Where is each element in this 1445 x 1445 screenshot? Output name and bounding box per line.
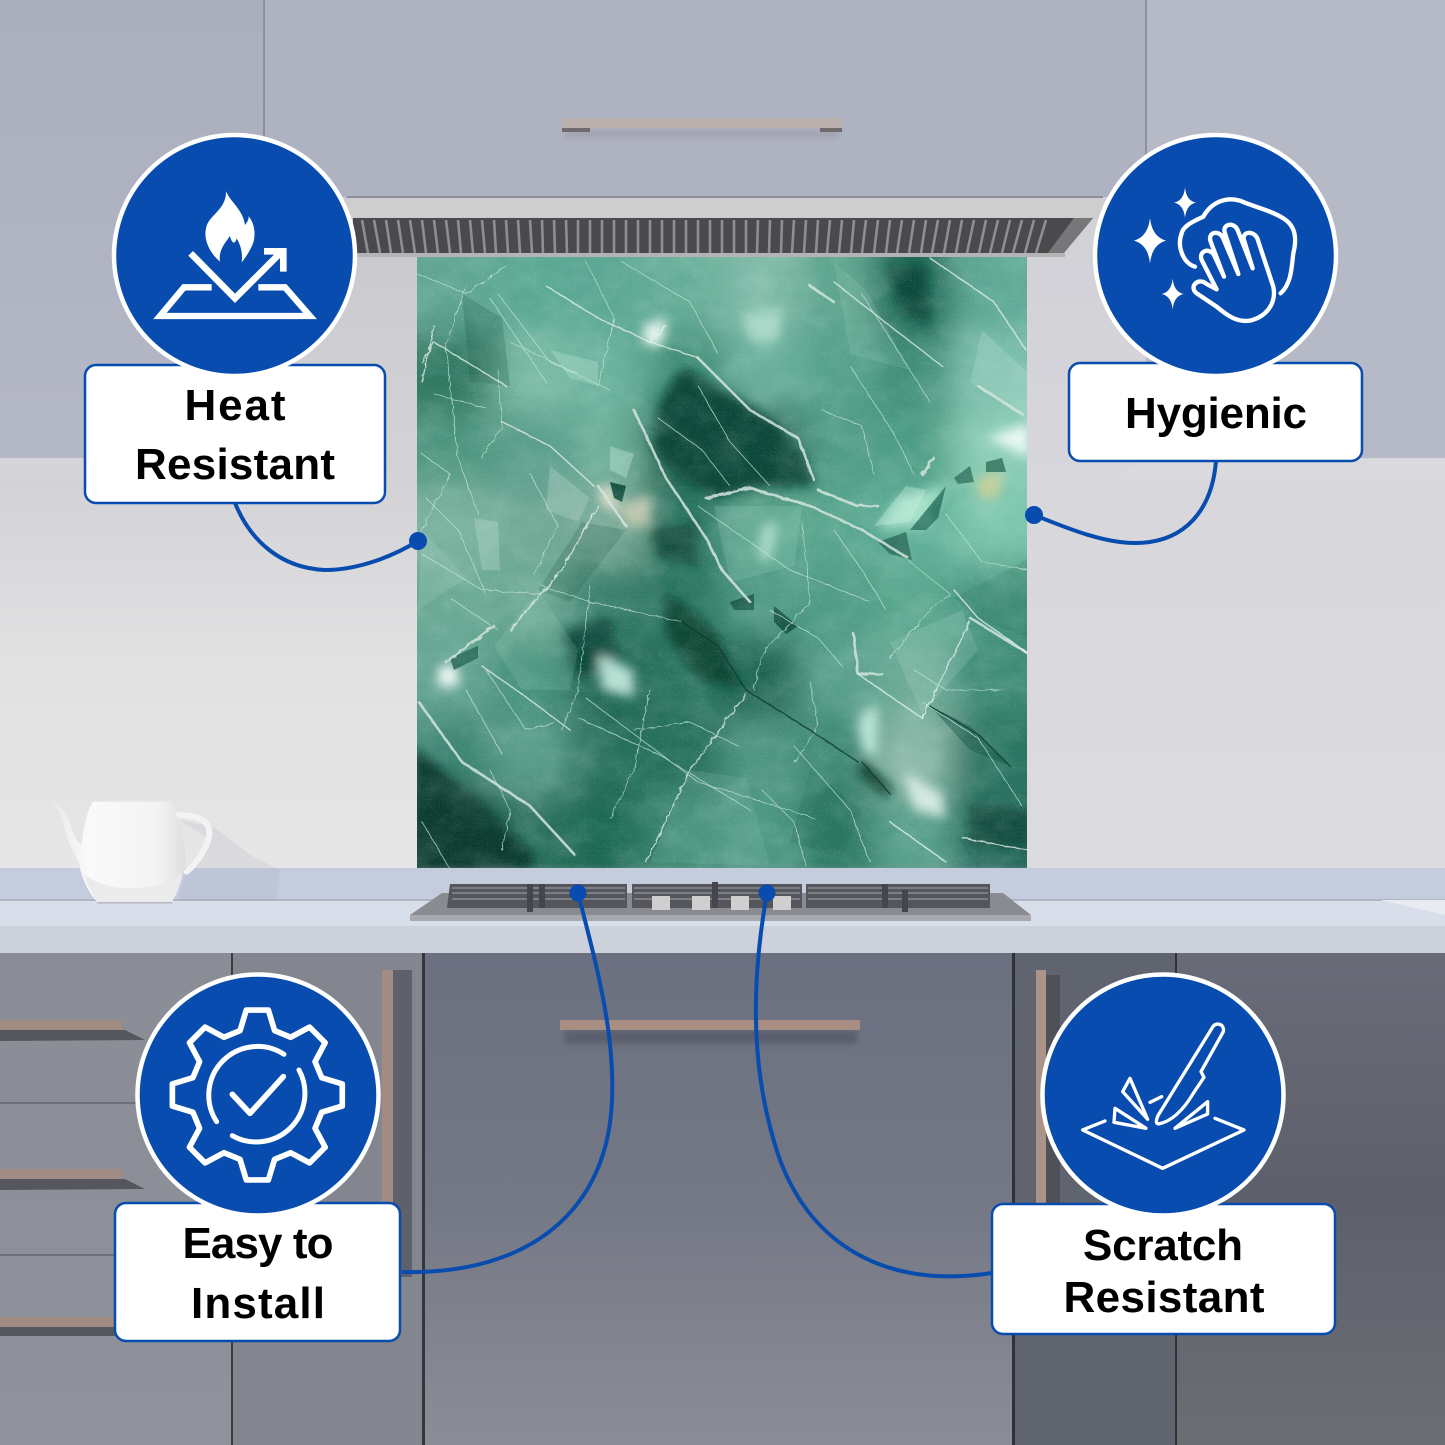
upper cabinet handle [562, 118, 842, 137]
lower cabinets [0, 953, 1445, 1445]
label box: scratch resistant [992, 1204, 1335, 1334]
label text: Easy to Install: Install [191, 1279, 325, 1328]
extractor hood [347, 196, 1103, 257]
connector dot: heat resistant [409, 532, 427, 550]
label text: Heat Resistant: Heat [184, 381, 286, 430]
marble sharp dark and bright patches [414, 266, 1029, 874]
label text: Hygienic: Hygienic [1125, 389, 1307, 438]
connector: scratch resistant [756, 893, 992, 1276]
worktop [0, 868, 1445, 953]
icon badge: easy to install [138, 974, 378, 1216]
icon: gear with check mark [172, 1010, 342, 1180]
teapot [48, 802, 280, 904]
label text: Scratch Resistant: Resistant [1064, 1273, 1265, 1322]
marble mottled texture [410, 250, 1037, 877]
marble splashback panel [417, 257, 1027, 868]
label text: Scratch Resistant: Scratch [1083, 1221, 1243, 1270]
label box: easy to install [115, 1203, 400, 1341]
label text: Scratch Resistant [1064, 1221, 1265, 1322]
wall background [0, 195, 1445, 875]
connector dot: scratch resistant [758, 884, 776, 902]
icon badge: hygienic [1095, 135, 1336, 376]
icon: flame over reflecting surface [160, 191, 310, 316]
marble tonal map [417, 257, 1027, 868]
label text: Easy to Install [182, 1219, 334, 1328]
marble veins [418, 258, 1029, 869]
callout: Hygienic [1025, 135, 1362, 543]
connector dot: hygienic [1025, 506, 1043, 524]
connector: heat resistant [235, 503, 418, 570]
marble speckle [410, 250, 1037, 877]
icon badge: scratch resistant [1042, 974, 1284, 1216]
icon badge: heat resistant [114, 135, 355, 376]
drawer and door handles [0, 970, 1060, 1336]
label box: hygienic [1069, 363, 1362, 461]
label text: Heat Resistant: Resistant [135, 440, 335, 489]
callout: Heat Resistant [85, 135, 427, 570]
callout: Easy to Install [115, 884, 612, 1341]
label box: heat resistant [85, 365, 385, 503]
label text: Easy to Install: Easy to [182, 1219, 334, 1268]
cooktop hob [410, 882, 1031, 921]
icon: hand wiping with cloth and sparkles [1134, 187, 1295, 321]
connector: hygienic [1034, 461, 1216, 543]
splashback shadow on counter [420, 868, 1027, 874]
label text: Heat Resistant [135, 381, 335, 489]
callout: Scratch Resistant [756, 884, 1335, 1334]
upper cabinets [0, 0, 1445, 479]
connector: easy to install [402, 893, 612, 1272]
connector dot: easy to install [570, 884, 586, 902]
marble fractured facets [418, 262, 1029, 869]
icon: knife scratching surface [1083, 1024, 1244, 1168]
